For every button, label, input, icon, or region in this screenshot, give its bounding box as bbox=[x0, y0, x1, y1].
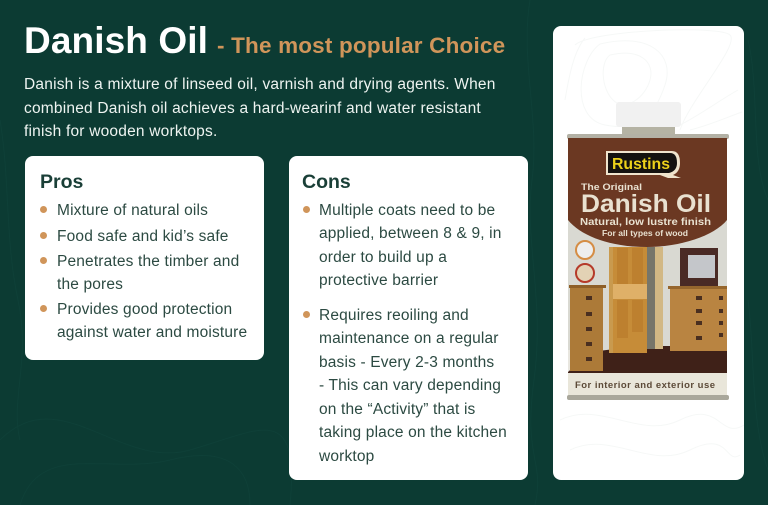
intro text: Danish is a mixture of linseed oil, varnish and drying agents. When bbox=[24, 76, 496, 93]
brown label bbox=[568, 138, 727, 247]
panel: cons bbox=[289, 156, 528, 480]
can lid bbox=[616, 102, 681, 136]
pros bullet 2 bbox=[40, 232, 47, 239]
pros text 2: Food safe and kid’s safe bbox=[57, 228, 229, 244]
cons text 2: on the “Activity” that is bbox=[319, 400, 475, 418]
product can illustration bbox=[567, 102, 729, 400]
cons text 2 bbox=[319, 306, 507, 464]
cons text 2: basis - Every 2-3 months bbox=[319, 354, 494, 370]
intro text: combined Danish oil achieves a hard-wearinf and water resistant bbox=[24, 100, 481, 116]
pros bullet 1 bbox=[40, 206, 47, 213]
left dresser bbox=[569, 285, 606, 371]
cons text 1: protective barrier bbox=[319, 272, 438, 289]
mirror bbox=[680, 248, 718, 287]
panel: product image bbox=[553, 26, 744, 480]
cons text 1: order to build up a bbox=[319, 248, 447, 266]
pros bullet 4 bbox=[40, 305, 47, 312]
right dresser bbox=[668, 286, 727, 351]
cons bullet 1 bbox=[303, 206, 310, 213]
door bbox=[609, 247, 663, 353]
intro text bbox=[24, 76, 496, 140]
cons text 1: applied, between 8 & 9, in bbox=[319, 225, 502, 242]
cons text 1: Multiple coats need to be bbox=[319, 202, 495, 218]
image panel contour pattern bbox=[560, 30, 744, 457]
cons text 2: Requires reoiling and bbox=[319, 306, 469, 324]
pros heading: Pros bbox=[40, 171, 83, 193]
can label text: For all types of wood bbox=[602, 229, 688, 238]
rustins logo bbox=[606, 151, 681, 178]
cons text 2: worktop bbox=[319, 448, 374, 464]
panel: pros bbox=[25, 156, 264, 360]
cons text 2: - This can vary depending bbox=[319, 377, 501, 394]
cons bullet 2 bbox=[303, 311, 310, 318]
cons text 2: taking place on the kitchen bbox=[319, 424, 507, 441]
pros text 3: Penetrates the timber and bbox=[57, 252, 239, 270]
pros text 4 bbox=[57, 300, 247, 341]
pros text 4: Provides good protection bbox=[57, 300, 232, 318]
cons text 1 bbox=[319, 202, 502, 289]
can body bbox=[567, 134, 729, 400]
pros bullet 3 bbox=[40, 257, 47, 264]
badges bbox=[576, 241, 594, 282]
cons text 2: maintenance on a regular bbox=[319, 330, 499, 347]
can label text bbox=[580, 182, 711, 238]
pros text 1: Mixture of natural oils bbox=[57, 202, 208, 218]
rustins logo: Rustins bbox=[612, 156, 670, 173]
cons heading: Cons bbox=[302, 171, 351, 193]
subtitle: - The most popular Choice bbox=[217, 33, 505, 58]
title: Danish Oil bbox=[24, 20, 208, 61]
pros text 3 bbox=[57, 252, 239, 293]
pros text 4: against water and moisture bbox=[57, 324, 247, 341]
can label text: Danish Oil bbox=[581, 190, 711, 218]
can label text: The Original bbox=[581, 182, 642, 193]
intro text: finish for wooden worktops. bbox=[24, 123, 218, 140]
can label text: Natural, low lustre finish bbox=[580, 216, 711, 228]
can footer text: For interior and exterior use bbox=[575, 380, 715, 391]
pros text 3: the pores bbox=[57, 276, 123, 293]
